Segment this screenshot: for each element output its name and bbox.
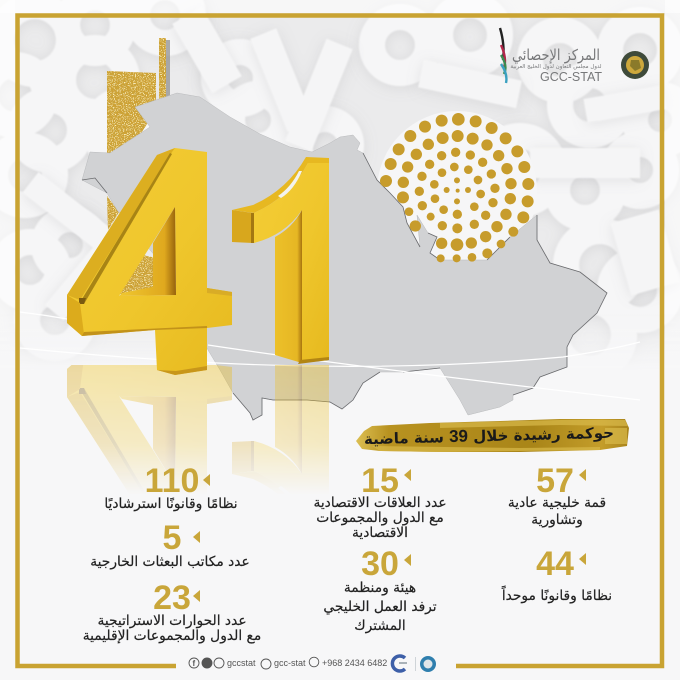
stat: 5: [90, 519, 250, 570]
map of GCC: [82, 93, 607, 420]
stat: 110: [104, 462, 238, 512]
stat: 110: نظامًا وقانونًا استرشاديًا: [104, 496, 238, 512]
stat: 44: [501, 545, 612, 604]
footer: social contacts: gccstat: [227, 658, 256, 668]
glitter strip: [159, 38, 170, 100]
stat: 57: [508, 462, 606, 528]
stat: 23: [83, 579, 261, 644]
stat: 30: 30: [361, 545, 399, 583]
stat: 44: 44: [536, 545, 574, 583]
logo text: لدول مجلس التعاون لدول الخليج العربية: [510, 64, 602, 70]
icon: social circles: [189, 657, 319, 669]
stat: 15: عدد العلاقات الاقتصادية: [313, 495, 447, 511]
logo text: GCC-STAT: [540, 70, 602, 84]
logo: G mark: [392, 656, 407, 671]
map coastline detail: [82, 153, 607, 420]
stat: 57: 57: [536, 462, 574, 500]
footer: social contacts: f: [192, 659, 196, 668]
logo: TUV badge: [415, 656, 436, 672]
logo ribbon: [500, 28, 506, 83]
stat: 57: وتشاورية: [531, 512, 583, 528]
gold glitter shapes behind map: [107, 71, 156, 294]
footer: social contacts: [189, 657, 387, 669]
logo: GCC-STAT: [500, 28, 602, 84]
footer: social contacts: gcc-stat: [274, 658, 306, 668]
stat: 30: [323, 545, 437, 634]
stat: 30: المشترك: [354, 618, 406, 634]
stat: 23: 23: [153, 579, 191, 617]
stat: 5: عدد مكاتب البعثات الخارجية: [90, 554, 250, 570]
stat: 15: 15: [361, 462, 399, 500]
white arcs: [20, 312, 640, 400]
stat: 5: 5: [163, 519, 181, 557]
footer: social contacts: +968 2434 6482: [322, 658, 387, 668]
stat: 30: هيئة ومنظمة: [344, 580, 416, 596]
stat: 23: مع الدول والمجموعات الإقليمية: [83, 628, 261, 644]
emblem: GCC: [621, 51, 649, 79]
gold number 4: [67, 148, 232, 375]
stat: 15: الاقتصادية: [352, 525, 408, 541]
banner: gold brush heading: [356, 419, 629, 452]
reflection of 41: [67, 365, 329, 488]
banner: gold brush heading: حوكمة رشيدة خلال 39 سنة ماضية: [364, 423, 614, 448]
stat: 30: ترفد العمل الخليجي: [323, 599, 437, 615]
logo text: [510, 46, 602, 84]
gold number 1: [232, 157, 329, 364]
stat: 15: مع الدول والمجموعات: [316, 510, 444, 526]
stat: 110: 110: [145, 462, 199, 500]
dotted gold circle: [380, 113, 534, 262]
stat: 15: [313, 462, 447, 541]
stat: 23: عدد الحوارات الاستراتيجية: [97, 613, 247, 629]
stat: 44: نظامًا وقانونًا موحداً: [501, 585, 612, 604]
stat: 57: قمة خليجية عادية: [508, 495, 606, 511]
logo text: المركز الإحصائي: [512, 46, 600, 65]
